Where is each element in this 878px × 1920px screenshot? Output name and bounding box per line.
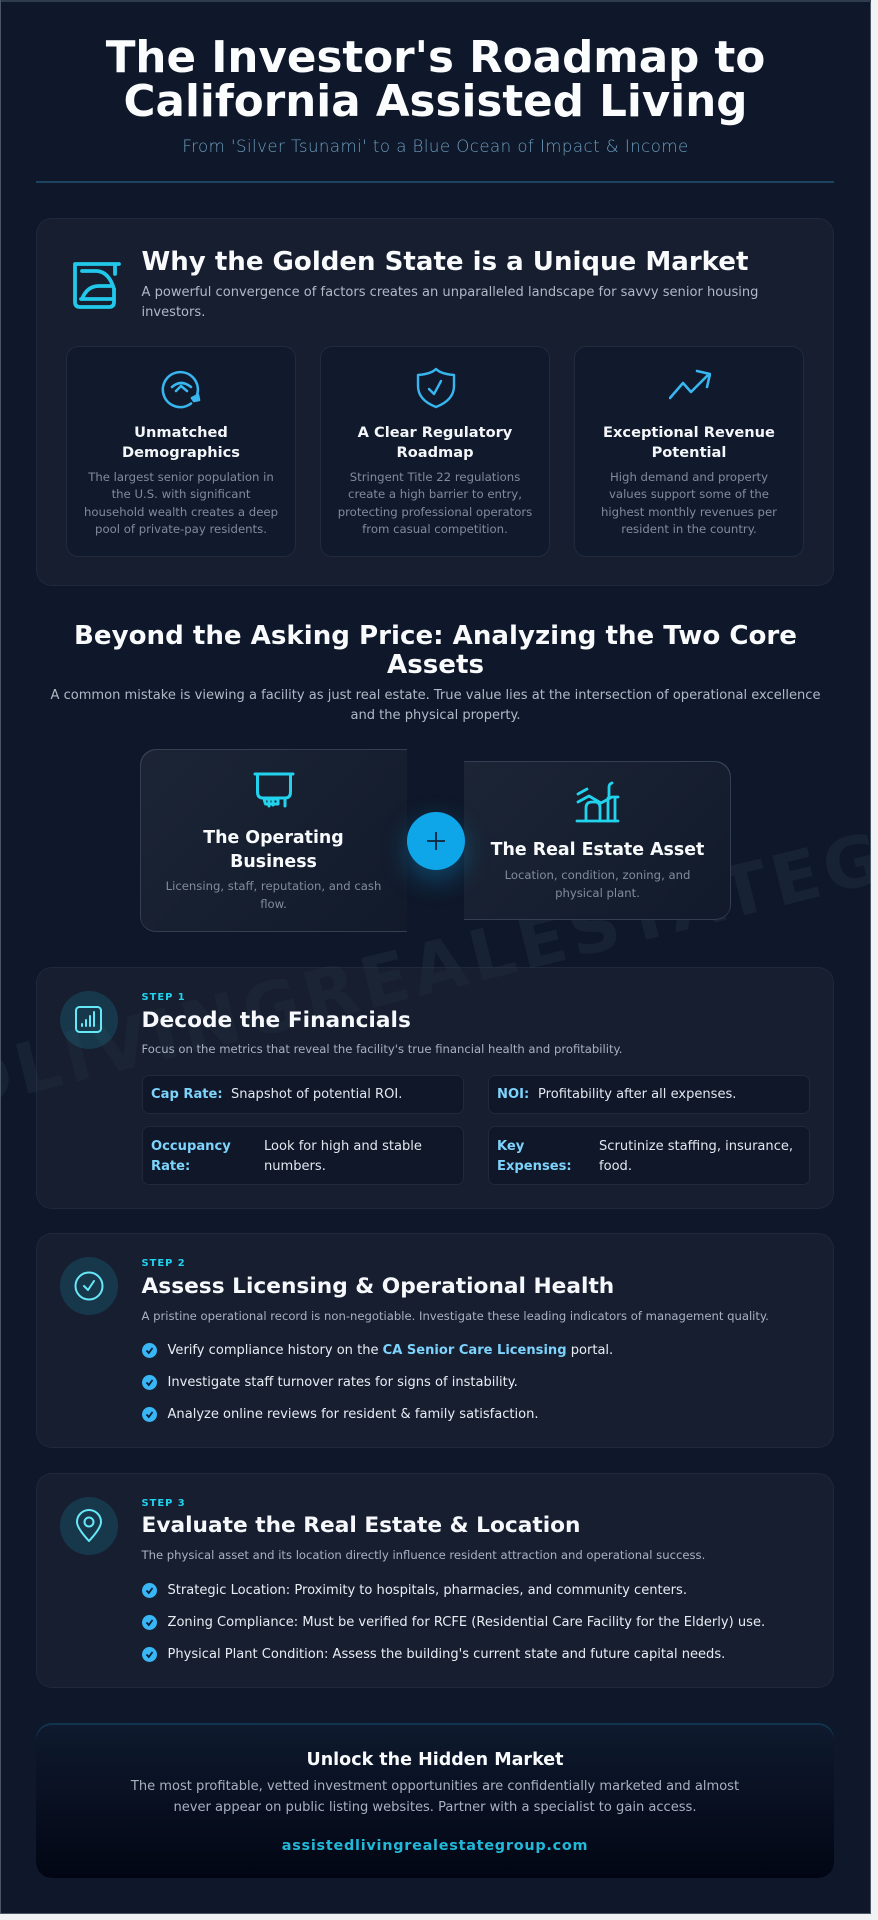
intro text: [142, 284, 758, 320]
section intro: and the physical property.: [350, 708, 521, 723]
section heading: Assets: [387, 650, 484, 680]
card text: [505, 868, 690, 900]
icon: operations: [254, 772, 294, 808]
card title: Potential: [652, 444, 726, 461]
step description: Focus on the metrics that reveal the facility's true financial health and profitability.: [142, 1042, 622, 1056]
metric: key expenses: Scrutinize staffing, insurance,: [599, 1138, 793, 1154]
icon: location pin: [60, 1497, 118, 1555]
card title: [203, 828, 344, 872]
metric: occupancy rate: numbers.: [264, 1159, 326, 1174]
step title: Assess Licensing & Operational Health: [142, 1274, 614, 1299]
step description: The physical asset and its location directly influence resident attraction and operational success.: [142, 1548, 705, 1562]
card title: [358, 424, 512, 461]
cta text: [130, 1779, 739, 1814]
card title: Exceptional Revenue: [603, 424, 775, 441]
card: unmatched demographics: [66, 346, 296, 557]
card text: [601, 470, 777, 536]
cta text: The most profitable, vetted investment opportunities are confidentially marketed and almost: [131, 1779, 739, 1794]
card text: The largest senior population in: [88, 470, 274, 484]
panel: why the golden state: [36, 218, 834, 586]
card text: create a high barrier to entry,: [348, 487, 522, 501]
step label: STEP 1: [142, 992, 186, 1003]
metric: occupancy rate: Occupancy: [151, 1138, 231, 1154]
card text: [84, 470, 278, 536]
card text: the U.S. with significant: [112, 487, 250, 501]
card title: Roadmap: [396, 444, 474, 461]
card text: flow.: [260, 896, 287, 910]
checklist item: Strategic Location: Proximity to hospitals, pharmacies, and community centers.: [168, 1583, 687, 1598]
cta text: never appear on public listing websites. Partner with a specialist to gain access.: [174, 1800, 696, 1814]
step title: Evaluate the Real Estate & Location: [142, 1513, 580, 1538]
step label: STEP 2: [142, 1258, 186, 1269]
card text: Location, condition, zoning, and: [505, 868, 690, 882]
metric: key expenses: Expenses:: [497, 1159, 572, 1174]
panel: step 1: [36, 967, 834, 1209]
metric: key expenses: Key: [497, 1138, 524, 1154]
card text: protecting professional operators: [338, 504, 532, 518]
card text: resident in the country.: [621, 522, 757, 536]
panel: step 3: [36, 1473, 834, 1688]
card text: from casual competition.: [362, 522, 508, 536]
step description: A pristine operational record is non-negotiable. Investigate these leading indicators of management quality.: [142, 1309, 769, 1323]
metric: cap rate: Cap Rate:: [151, 1087, 223, 1102]
title: [106, 33, 765, 126]
card text: physical plant.: [555, 886, 640, 900]
heading: Why the Golden State is a Unique Market: [142, 247, 748, 277]
checklist item: Analyze online reviews for resident & family satisfaction.: [168, 1407, 539, 1422]
checklist item: Verify compliance history on the CA Senior Care Licensing portal.: [168, 1343, 613, 1358]
intro text: investors.: [142, 305, 205, 320]
card title: Unmatched: [134, 424, 228, 441]
cta heading: Unlock the Hidden Market: [307, 1750, 563, 1770]
section intro: [50, 688, 820, 723]
section heading: Beyond the Asking Price: Analyzing the Two Core: [74, 620, 797, 650]
section heading: [74, 620, 797, 680]
metric: cap rate: Snapshot of potential ROI.: [231, 1087, 402, 1102]
subtitle: From 'Silver Tsunami' to a Blue Ocean of Impact & Income: [182, 137, 689, 156]
card title: Demographics: [122, 444, 240, 461]
card text: Stringent Title 22 regulations: [350, 470, 520, 484]
panel: operating business: [140, 749, 407, 932]
card text: household wealth creates a deep: [84, 504, 278, 518]
metric: NOI: NOI:: [497, 1087, 529, 1102]
card title: The Operating: [203, 828, 344, 848]
card: revenue potential: [574, 346, 804, 557]
icon: plus connector: [407, 812, 465, 870]
panel: step 2: [36, 1233, 834, 1448]
card title: Business: [230, 852, 317, 872]
card text: pool of private-pay residents.: [95, 522, 267, 536]
icon: shield check: [416, 368, 456, 408]
card title: [603, 424, 775, 461]
card text: values support some of the: [609, 487, 769, 501]
panel: real estate asset: [464, 761, 731, 920]
card text: highest monthly revenues per: [601, 504, 777, 518]
card text: [166, 879, 381, 910]
section intro: A common mistake is viewing a facility as just real estate. True value lies at the intersection of operational excellence: [50, 688, 820, 702]
checklist item: Investigate staff turnover rates for signs of instability.: [168, 1375, 518, 1390]
checklist item: Physical Plant Condition: Assess the building's current state and future capital needs.: [168, 1647, 725, 1662]
metric: key expenses: [488, 1126, 810, 1185]
card: regulatory roadmap: [320, 346, 550, 557]
card title: A Clear Regulatory: [358, 424, 512, 441]
card title: [122, 424, 240, 461]
icon: check circle: [60, 1257, 118, 1315]
card text: High demand and property: [610, 470, 768, 484]
metric: occupancy rate: [142, 1126, 464, 1185]
icon: property: [576, 782, 620, 822]
metric: cap rate: [142, 1075, 464, 1114]
step label: STEP 3: [142, 1498, 186, 1509]
metric: occupancy rate: Rate:: [151, 1159, 190, 1174]
metric: key expenses: food.: [599, 1159, 632, 1174]
icon: bar chart: [60, 991, 118, 1049]
website link: assistedlivingrealestategroup.com: [282, 1838, 588, 1854]
card text: Licensing, staff, reputation, and cash: [166, 879, 381, 893]
card title: The Real Estate Asset: [491, 840, 704, 860]
metric: occupancy rate: Look for high and stable: [264, 1138, 422, 1154]
icon: gauge: [162, 370, 200, 408]
panel: call to action: [36, 1723, 834, 1878]
intro text: A powerful convergence of factors creates an unparalleled landscape for savvy senior housing: [142, 284, 758, 300]
title: The Investor's Roadmap to: [106, 33, 765, 83]
metric: NOI: Profitability after all expenses.: [538, 1087, 736, 1102]
step title: Decode the Financials: [142, 1008, 411, 1033]
title: California Assisted Living: [124, 76, 747, 126]
icon: building and car: [73, 262, 121, 309]
checklist item: Zoning Compliance: Must be verified for RCFE (Residential Care Facility for the Elderly) use.: [168, 1615, 765, 1630]
icon: trending arrow: [669, 370, 711, 400]
card text: [338, 470, 532, 536]
metric: NOI: [488, 1075, 810, 1114]
